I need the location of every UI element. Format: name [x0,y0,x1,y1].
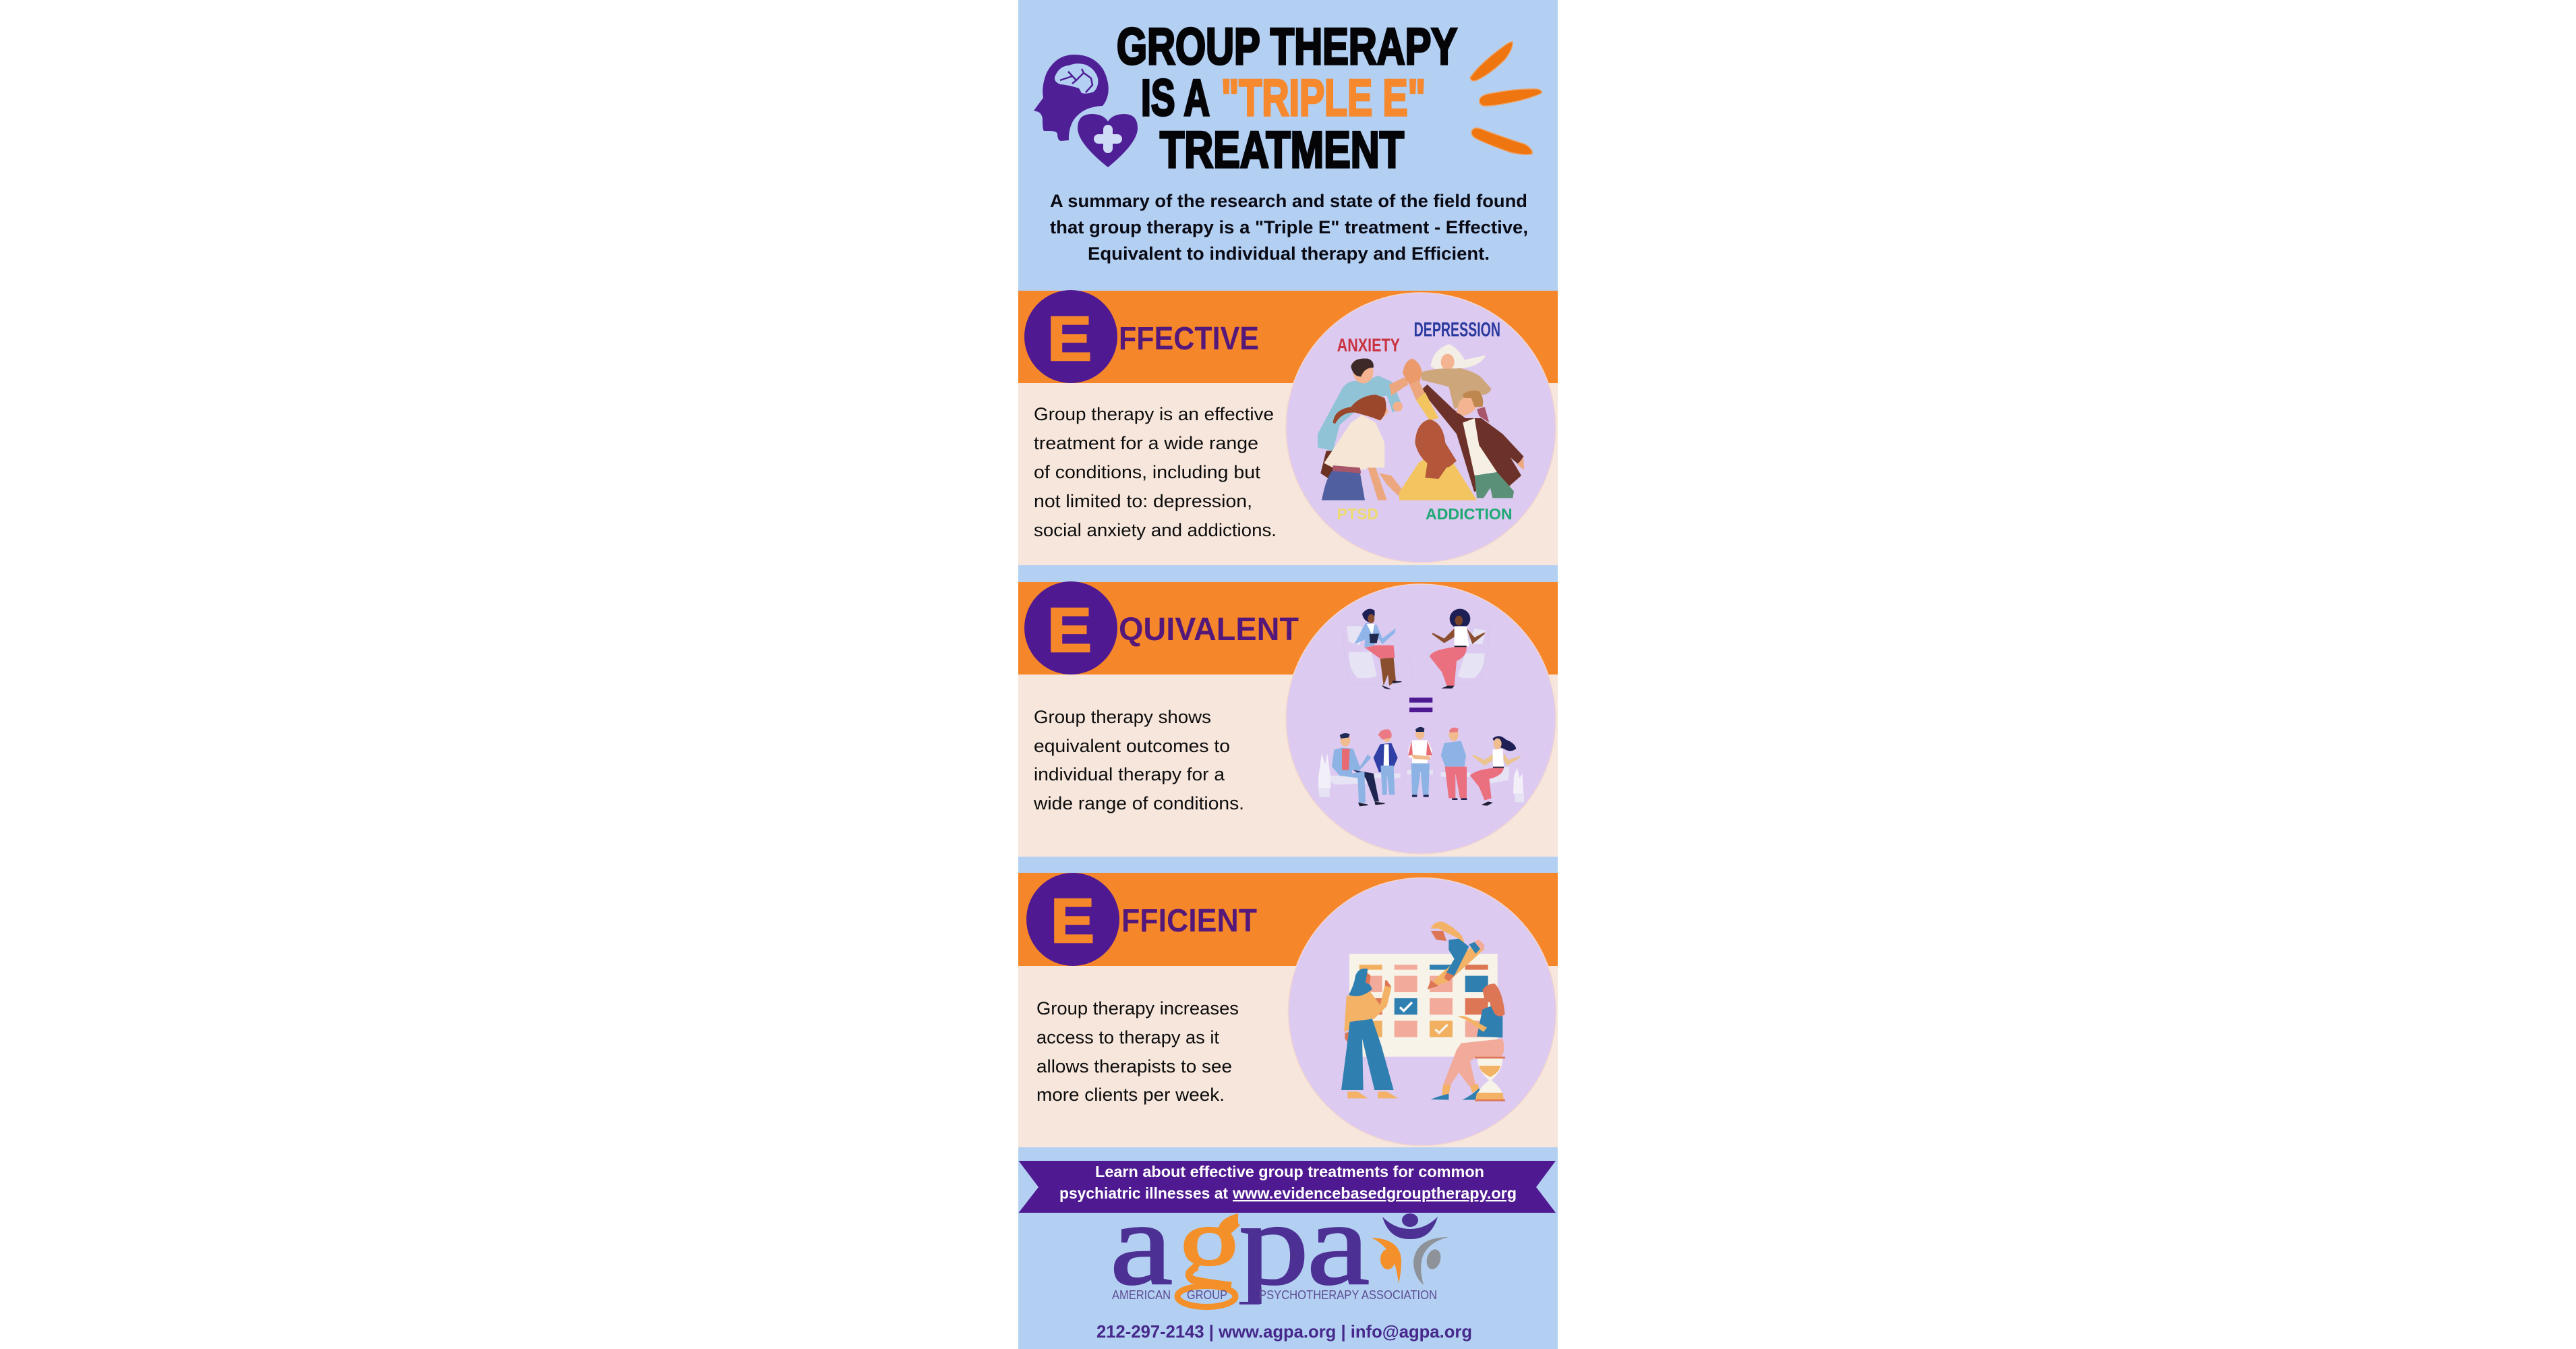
icon: orange sparks [1470,42,1542,154]
E badge: efficient: E [1051,886,1094,956]
icon: calendar [1349,954,1498,1057]
logo: AGPA: p [1239,1178,1309,1310]
label: depression: DEPRESSION [1414,318,1500,341]
subtitle text block: Equivalent to individual therapy and Efficient. [1088,243,1490,264]
logo: AGPA [1112,1213,1449,1310]
panel: effective [1018,290,1558,565]
footer contact line: 212-297-2143 | www.agpa.org | info@agpa.org [1096,1321,1472,1342]
logo: AGPA: a [1110,1178,1173,1310]
text block: effective: Group therapy is an effective [1034,404,1274,424]
label: addiction: ADDICTION [1426,505,1513,523]
text block: effective: treatment for a wide range [1034,433,1258,453]
E badge: equivalent [1024,581,1117,674]
text block: efficient: Group therapy increases [1036,998,1239,1018]
logo: AGPA: GROUP [1187,1288,1227,1302]
text block: efficient: access to therapy as it [1036,1027,1219,1047]
logo: AGPA: AMERICAN [1112,1288,1171,1302]
heading: efficient: FFICIENT [1121,903,1257,939]
title: IS A [1141,69,1210,127]
text block: efficient: more clients per week. [1036,1085,1225,1105]
text block: efficient [1036,998,1239,1105]
icon: group therapy circle [1318,727,1524,806]
panel: infographic background [1018,0,1558,1349]
title: "TRIPLE E" [1221,69,1426,127]
heading: equivalent: QUIVALENT [1119,612,1299,648]
logo: AGPA: PSYCHOTHERAPY ASSOCIATION [1259,1288,1437,1302]
text block: equivalent: wide range of conditions. [1033,793,1244,813]
icon: individual therapy pair [1343,609,1489,689]
banner: learn more: www.evidencebasedgrouptherapy.org [1232,1184,1517,1202]
text block: equivalent: individual therapy for a [1034,764,1225,784]
subtitle text block: A summary of the research and state of the field found [1050,191,1527,211]
text block: effective [1034,404,1277,540]
label: PTSD: PTSD [1337,505,1378,523]
icon: equals sign [1409,697,1432,712]
illustration circle: calendar planning with hourglass [1288,878,1556,1145]
icon: logo figures [1371,1213,1449,1285]
title: GROUP THERAPY [1117,18,1457,76]
logo: AGPA: g [1177,1178,1244,1310]
illustration circle: individual therapy equals group therapy [1286,584,1556,854]
icon: seated woman on hourglass [1431,983,1505,1101]
logo: AGPA: a [1307,1178,1370,1310]
text block: effective: of conditions, including but [1034,462,1261,482]
banner: learn more: Learn about effective group treatments for common [1095,1163,1484,1180]
panel: efficient [1018,873,1558,1147]
E badge: effective [1024,290,1117,383]
text block: effective: social anxiety and addictions. [1034,520,1277,540]
icon: woman with pencil [1428,921,1485,989]
text block: equivalent: Group therapy shows [1034,707,1211,727]
title: TREATMENT [1160,121,1404,179]
text block: equivalent: equivalent outcomes to [1034,736,1230,756]
title [1117,18,1457,179]
text block: equivalent [1033,707,1244,813]
E badge: efficient [1026,873,1119,966]
text block: efficient: allows therapists to see [1036,1056,1232,1077]
banner: learn more: psychiatric illnesses at [1059,1184,1228,1202]
label: anxiety: ANXIETY [1337,335,1400,355]
heading: effective: FFECTIVE [1119,321,1259,357]
subtitle text block: that group therapy is a "Triple E" treatment - Effective, [1050,217,1528,237]
E badge: equivalent: E [1047,595,1092,665]
illustration circle: group high five with condition labels [1286,293,1556,563]
text block: effective: not limited to: depression, [1034,491,1252,511]
E badge: effective: E [1047,304,1092,374]
subtitle text block [1050,191,1528,264]
banner: learn more [1018,1161,1556,1213]
icon: standing woman [1341,969,1398,1098]
icon: head with brain and heart [1034,55,1138,167]
panel: equivalent [1018,581,1558,857]
